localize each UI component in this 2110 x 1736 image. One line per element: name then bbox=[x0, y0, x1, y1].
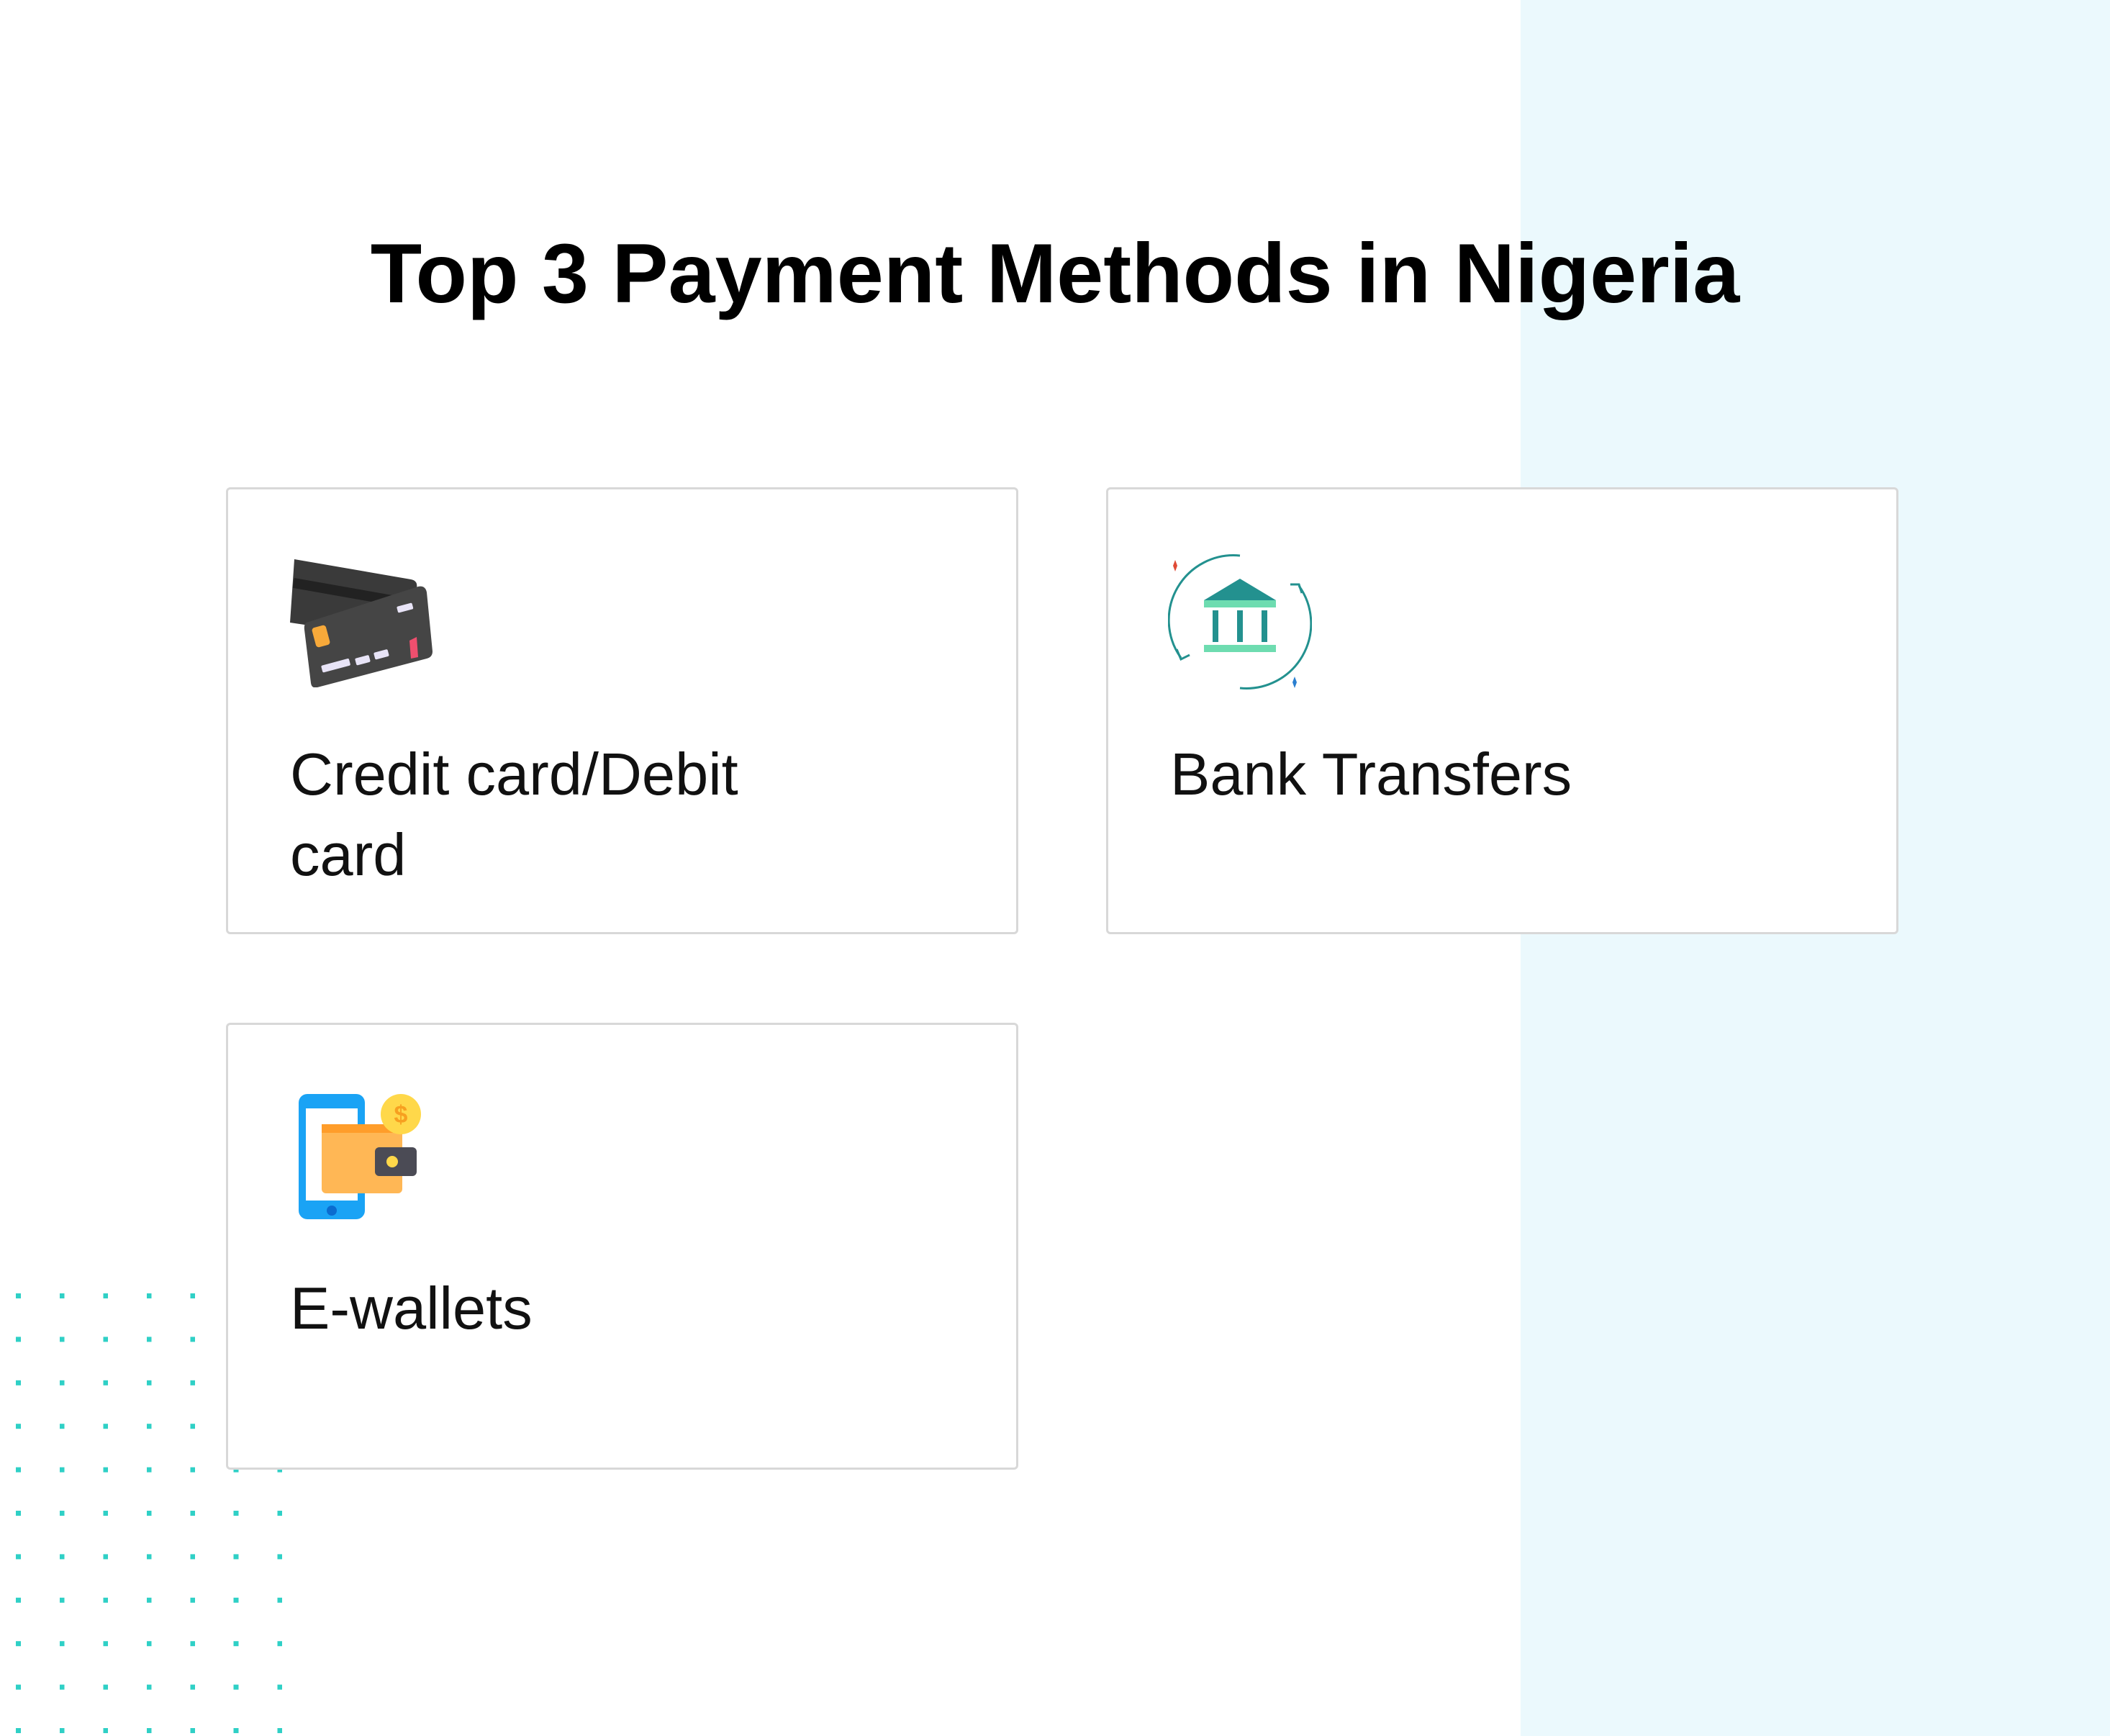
icon: credit cards bbox=[290, 559, 433, 687]
label: e-wallets: E-wallets bbox=[290, 1275, 533, 1342]
icon: bank bbox=[1168, 554, 1312, 690]
label: credit card: card bbox=[290, 821, 406, 888]
title: Top 3 Payment Methods in Nigeria bbox=[371, 226, 1739, 320]
icon: e-wallet: $ bbox=[394, 1101, 408, 1129]
icon: e-wallet bbox=[299, 1094, 421, 1219]
background panel: light blue bbox=[1521, 0, 2110, 1736]
dot pattern bbox=[16, 1293, 282, 1733]
panel: e-wallets bbox=[226, 1023, 1018, 1470]
panel: bank transfers bbox=[1106, 487, 1898, 934]
label: bank transfers: Bank Transfers bbox=[1170, 741, 1572, 808]
panel: credit card bbox=[226, 487, 1018, 934]
label: credit card bbox=[290, 741, 738, 888]
label: credit card: Credit card/Debit bbox=[290, 741, 738, 808]
